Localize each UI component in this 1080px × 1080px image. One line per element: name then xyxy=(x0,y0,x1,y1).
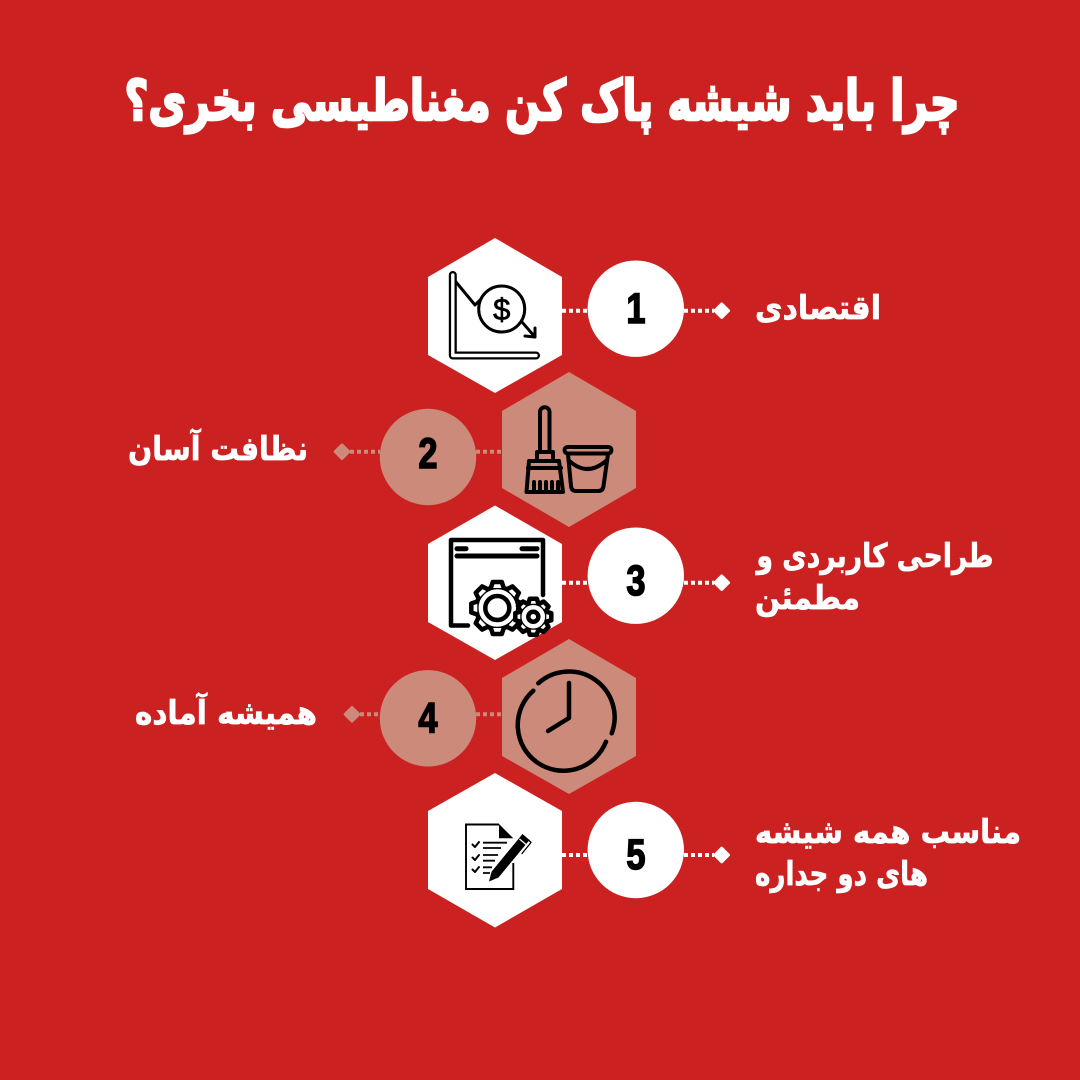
icon: falling cost chart: $ xyxy=(493,292,510,327)
hexagon xyxy=(428,773,562,928)
number 4: 4 xyxy=(418,695,438,742)
diamond xyxy=(343,705,361,723)
hexagon xyxy=(428,238,562,393)
connector dots xyxy=(562,581,714,585)
number 5: 5 xyxy=(626,831,646,879)
hexagon xyxy=(502,372,636,527)
number 3: 3 xyxy=(626,557,646,605)
diamond xyxy=(713,574,731,592)
connector dots xyxy=(350,450,502,454)
hexagon xyxy=(428,506,562,660)
connector dots xyxy=(562,309,714,313)
label: طراحی کاربردی و xyxy=(755,536,994,576)
label: همیشه آماده xyxy=(135,692,317,732)
number 2: 2 xyxy=(418,430,438,478)
number circle xyxy=(588,260,684,357)
small gear xyxy=(515,599,551,635)
step 3: practical and reliable design xyxy=(428,506,994,660)
number circle xyxy=(380,670,476,766)
label: مناسب همه شیشه xyxy=(755,812,1021,851)
number 1: 1 xyxy=(626,285,646,333)
number circle xyxy=(380,409,476,505)
label: نظافت آسان xyxy=(128,428,308,468)
connector dots xyxy=(562,853,714,857)
label xyxy=(755,536,994,618)
hexagon xyxy=(502,639,636,794)
large gear xyxy=(471,582,523,634)
number circle xyxy=(588,528,684,624)
label: اقتصادی xyxy=(755,288,881,327)
icon: window with gears xyxy=(451,540,551,635)
label: مطمئن xyxy=(755,578,860,618)
number circle xyxy=(588,802,684,898)
diamond xyxy=(333,443,351,461)
connector dots xyxy=(360,712,502,716)
label xyxy=(755,812,1021,894)
diamond xyxy=(713,302,731,320)
icon: checklist and pen xyxy=(466,824,531,889)
step 5: suits all double glazing xyxy=(428,773,1021,928)
icon: clock xyxy=(518,672,615,771)
label: های دو جداره xyxy=(755,854,928,894)
step 4: always ready xyxy=(135,639,636,794)
icon: falling cost chart xyxy=(453,275,536,356)
icon: broom and bucket xyxy=(526,407,612,492)
diamond xyxy=(713,846,731,864)
step 1: economical xyxy=(428,238,881,393)
step 2: easy cleaning xyxy=(128,372,636,527)
